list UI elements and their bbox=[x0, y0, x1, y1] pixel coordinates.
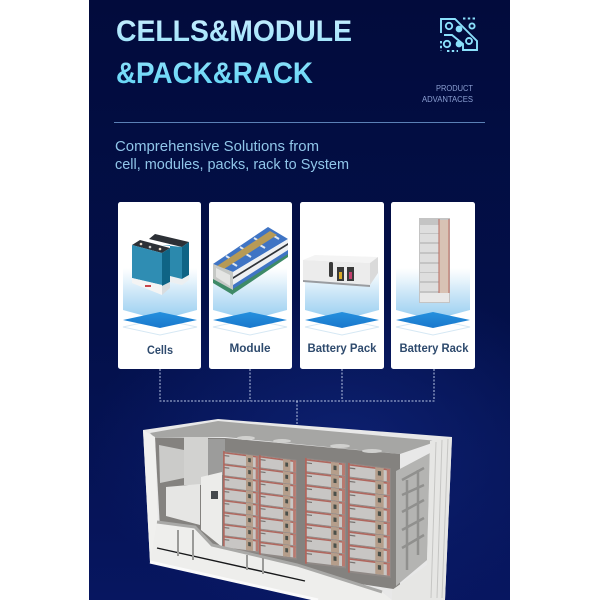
subtitle: Comprehensive Solutions from bbox=[115, 138, 319, 155]
left frame post bbox=[143, 430, 158, 562]
battery racks bbox=[223, 451, 391, 578]
dashed connectors bbox=[160, 369, 434, 424]
label: cells: Cells bbox=[147, 345, 173, 357]
icon: battery module bbox=[213, 227, 288, 295]
subtitle bbox=[115, 138, 349, 173]
card: cells bbox=[118, 202, 201, 369]
floor bay with pipe bbox=[150, 522, 392, 600]
label: module: Module bbox=[230, 343, 270, 355]
left wall equipment bbox=[159, 437, 225, 547]
product advantages label bbox=[422, 83, 474, 104]
dark navy panel bbox=[89, 0, 510, 600]
icon: battery pack bbox=[303, 255, 378, 287]
subtitle: cell, modules, packs, rack to System bbox=[115, 156, 349, 173]
title bbox=[116, 15, 352, 90]
roof vents bbox=[237, 436, 382, 453]
side lattice panel bbox=[396, 453, 430, 586]
product advantages label: ADVANTACES bbox=[422, 94, 473, 104]
icon: battery rack bbox=[419, 218, 450, 303]
card: module bbox=[209, 202, 292, 369]
card: battery rack bbox=[391, 202, 475, 369]
label: battery pack: Battery Pack bbox=[308, 343, 377, 355]
product advantages label: PRODUCT bbox=[436, 83, 474, 93]
card: battery pack bbox=[300, 202, 384, 369]
label: battery rack: Battery Rack bbox=[400, 343, 469, 355]
title: CELLS&MODULE bbox=[116, 15, 352, 48]
icon: battery cells bbox=[132, 234, 189, 295]
container shell bbox=[143, 419, 452, 600]
divider bbox=[114, 122, 485, 123]
title: &PACK&RACK bbox=[116, 57, 313, 90]
container system illustration bbox=[143, 419, 452, 600]
corrugated door bbox=[392, 437, 452, 600]
icon: circuit board bbox=[441, 18, 477, 51]
container roof bbox=[150, 421, 438, 454]
